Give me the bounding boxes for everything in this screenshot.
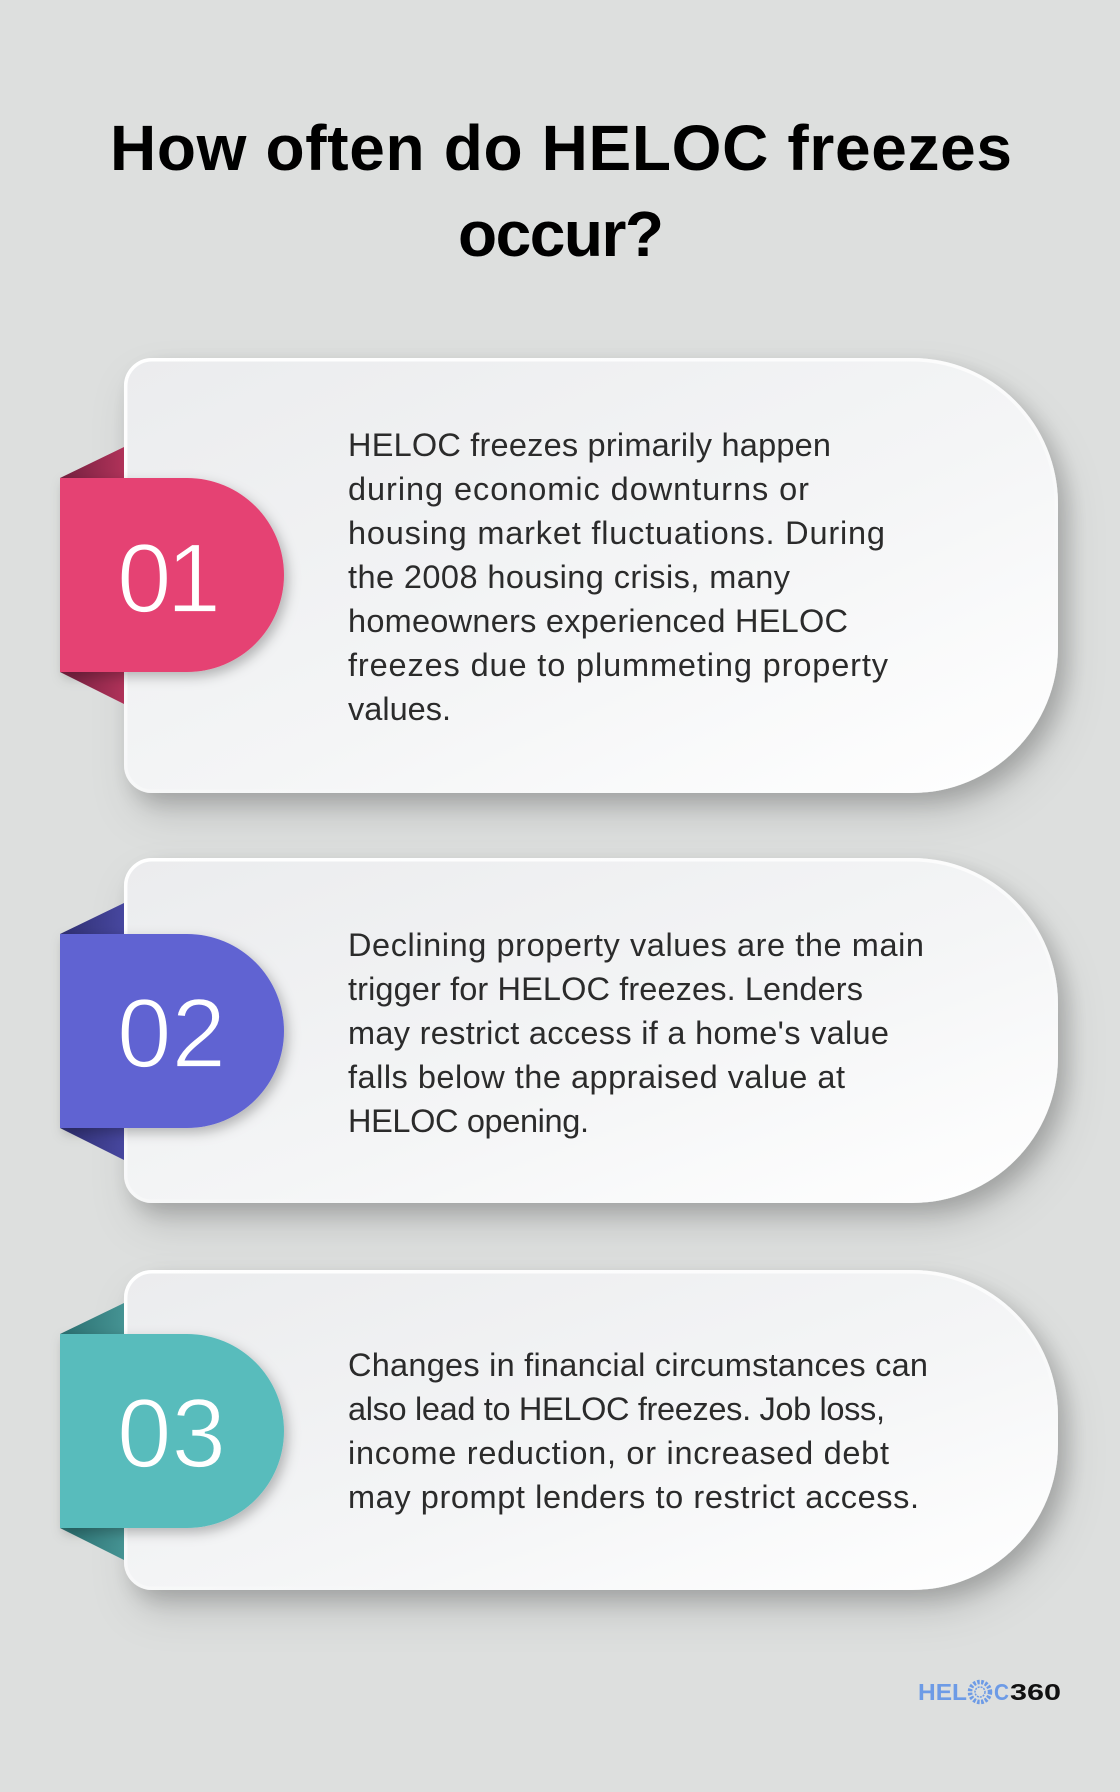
text block 1: during economic downturns or bbox=[348, 471, 809, 507]
card 3 bbox=[124, 1270, 1058, 1590]
text block 3: Changes in financial circumstances can bbox=[348, 1347, 928, 1383]
ribbon fold top 3 bbox=[60, 1303, 124, 1334]
icon: logo swirl bbox=[970, 1682, 990, 1702]
ribbon fold top 2 bbox=[60, 903, 124, 934]
card 1 highlight bbox=[126, 360, 1056, 791]
text block 1: the 2008 housing crisis, many bbox=[348, 559, 791, 595]
number badge 2 bbox=[60, 934, 284, 1128]
text block 2: HELOC opening. bbox=[348, 1103, 589, 1139]
ribbon fold bottom 2 bbox=[60, 1128, 124, 1160]
logo: HELOC360 bbox=[918, 1679, 1061, 1705]
ribbon fold bottom 1 bbox=[60, 672, 124, 704]
text block 1: housing market fluctuations. During bbox=[348, 515, 885, 551]
text block 2: falls below the appraised value at bbox=[348, 1059, 845, 1095]
text block 3 bbox=[348, 1347, 928, 1515]
title bbox=[110, 112, 1012, 270]
text block 2: trigger for HELOC freezes. Lenders bbox=[348, 971, 863, 1007]
text block 2: Declining property values are the main bbox=[348, 927, 924, 963]
number 03: 03 bbox=[117, 1378, 226, 1488]
title: How often do HELOC freezes bbox=[110, 112, 1012, 184]
logo: HELOC360: HEL bbox=[918, 1679, 967, 1705]
text block 2 bbox=[348, 927, 924, 1139]
text block 1: HELOC freezes primarily happen bbox=[348, 427, 831, 463]
text block 3: income reduction, or increased debt bbox=[348, 1435, 889, 1471]
card 3 highlight bbox=[126, 1272, 1056, 1588]
text block 3: may prompt lenders to restrict access. bbox=[348, 1479, 919, 1515]
logo: HELOC360: 360 bbox=[1010, 1679, 1061, 1705]
panel: step 3 bbox=[60, 1270, 1058, 1590]
ribbon fold bottom 3 bbox=[60, 1528, 124, 1560]
card 1 bbox=[124, 358, 1058, 793]
number badge 3 bbox=[60, 1334, 284, 1528]
text block 1 bbox=[348, 427, 889, 727]
ribbon fold top 1 bbox=[60, 447, 124, 478]
logo: HELOC360: C bbox=[994, 1679, 1009, 1705]
number 01: 01 bbox=[117, 523, 217, 633]
title: occur? bbox=[458, 198, 664, 270]
text block 2: may restrict access if a home's value bbox=[348, 1015, 889, 1051]
panel: step 2 bbox=[60, 858, 1058, 1203]
number 02: 02 bbox=[117, 978, 226, 1088]
text block 1: freezes due to plummeting property bbox=[348, 647, 889, 683]
text block 1: homeowners experienced HELOC bbox=[348, 603, 848, 639]
text block 1: values. bbox=[348, 691, 451, 727]
number badge 1 bbox=[60, 478, 284, 672]
panel: step 1 bbox=[60, 358, 1058, 793]
card 2 bbox=[124, 858, 1058, 1203]
text block 3: also lead to HELOC freezes. Job loss, bbox=[348, 1391, 885, 1427]
card 2 highlight bbox=[126, 860, 1056, 1201]
